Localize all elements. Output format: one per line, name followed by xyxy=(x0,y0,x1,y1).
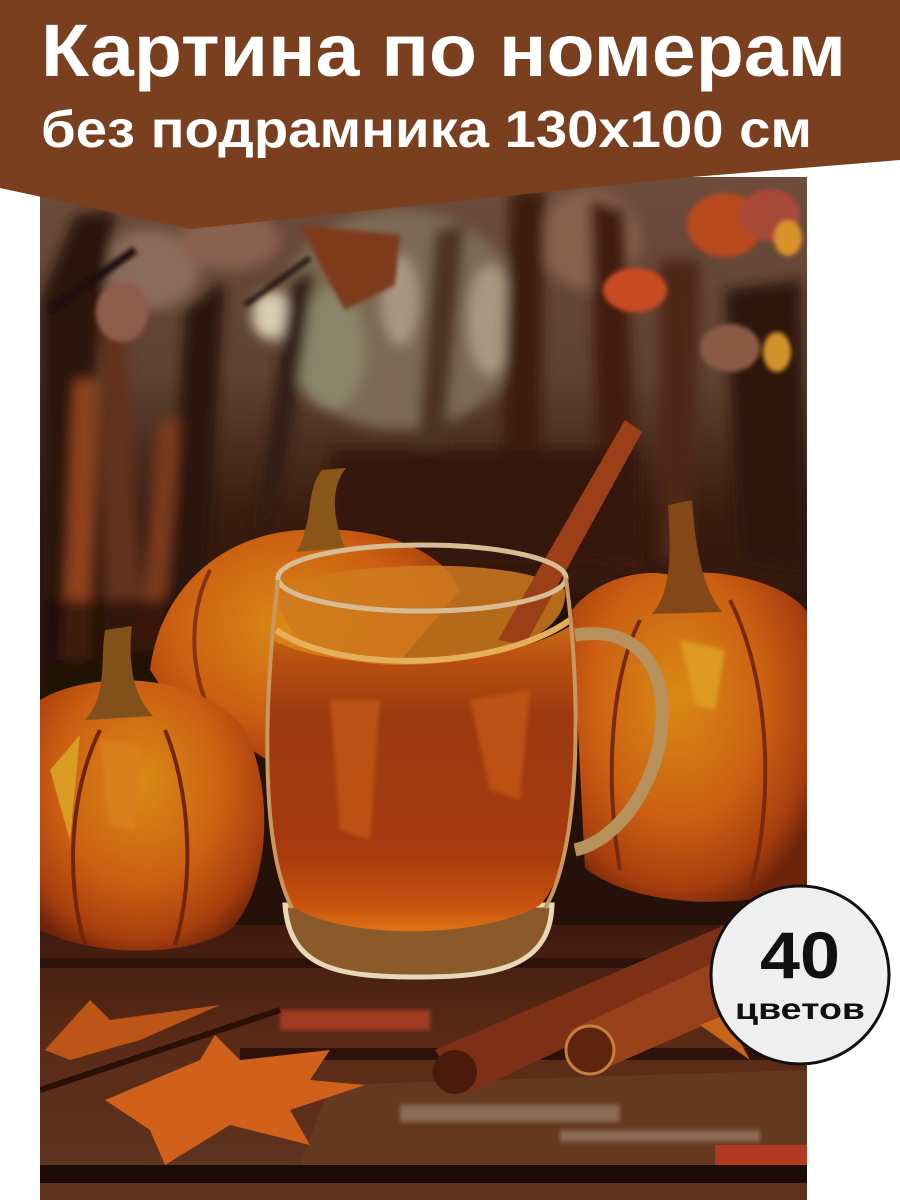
glass mug xyxy=(267,420,662,977)
tea streaks xyxy=(330,690,530,840)
badge: 40 colours xyxy=(711,886,889,1064)
mug handle xyxy=(575,634,662,850)
mug rim xyxy=(278,545,566,611)
tea xyxy=(267,625,577,931)
title: Картина по номерам xyxy=(41,9,846,92)
pumpkin right xyxy=(572,500,807,902)
cinnamon sticks xyxy=(433,925,750,1095)
painting xyxy=(40,177,807,1200)
mug upper glass xyxy=(280,566,565,665)
mug base xyxy=(285,905,552,977)
header banner xyxy=(0,0,900,229)
table xyxy=(40,925,807,1200)
badge: 40 colours: цветов xyxy=(735,993,865,1026)
forest background xyxy=(40,177,807,930)
subtitle: без подрамника 130х100 см xyxy=(41,101,812,159)
badge: 40 colours: 40 xyxy=(760,918,840,992)
pumpkin front left xyxy=(40,626,264,951)
cinnamon stick in mug xyxy=(498,420,642,645)
maple leaves xyxy=(40,1000,365,1165)
autumn leaves top xyxy=(50,189,802,372)
pumpkin back left xyxy=(150,468,460,780)
